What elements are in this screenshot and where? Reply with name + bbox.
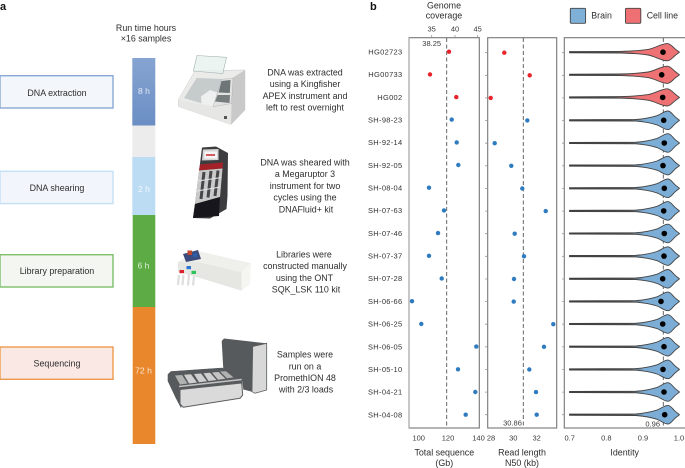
description: Library preparation: Libraries were	[276, 249, 332, 259]
step box: Sequencing	[0, 347, 113, 379]
violin: SH-98-23	[570, 111, 680, 130]
description: DNA extraction: using a Kingfisher	[270, 79, 340, 89]
violin: SH-04-08	[570, 405, 680, 424]
genome coverage ticks: 45	[474, 25, 482, 34]
sample labels: SH-04-21	[368, 388, 402, 397]
icon: PromethION sequencer	[168, 338, 267, 408]
x axis ticks: total sequence	[412, 434, 485, 442]
x axis ticks: identity	[564, 434, 684, 442]
description: Library preparation: SQK_LSK 110 kit	[272, 284, 341, 294]
sample labels: SH-05-10	[368, 365, 402, 374]
x axis title: read length: N50 (kb)	[505, 458, 539, 468]
genome coverage ticks: 35	[428, 25, 436, 34]
icon: ligation kit box	[178, 250, 251, 291]
icon: Kingfisher instrument	[178, 56, 245, 124]
bar segment: rest	[132, 126, 155, 157]
panel label a: a	[0, 1, 7, 13]
legend: Brain: Brain	[591, 11, 612, 21]
x axis ticks: identity: 0.9	[638, 434, 648, 442]
step box: Library preparation: Library preparation	[20, 266, 94, 276]
sample labels: HG02723	[368, 47, 402, 56]
front unit	[168, 368, 243, 408]
sample labels: SH-07-28	[368, 274, 402, 283]
x axis ticks: read length: 28	[487, 434, 495, 442]
description: DNA shearing: DNA was sheared with	[260, 157, 350, 167]
description: Sequencing: with 2/3 loads	[278, 385, 334, 395]
run time heading: Run time hours	[116, 23, 177, 33]
description: DNA shearing: a Megaruptor 3	[275, 169, 335, 179]
description: Sequencing: PromethION 48	[274, 373, 336, 383]
step box: Sequencing: Sequencing	[34, 358, 80, 368]
sample labels: SH-92-05	[368, 161, 402, 170]
sample labels: SH-07-63	[368, 206, 402, 215]
description: Sequencing: Samples were	[277, 350, 333, 360]
row ticks	[485, 53, 488, 415]
back unit	[222, 338, 267, 393]
violin: SH-06-05	[570, 337, 680, 356]
dots: total sequence	[410, 50, 478, 417]
description: DNA extraction: DNA was extracted	[267, 68, 343, 78]
chart: identity violins	[562, 38, 685, 458]
bar segment: 2 h	[132, 157, 155, 215]
description: Library preparation	[263, 249, 347, 294]
description: DNA shearing	[260, 157, 350, 214]
step box: Library preparation	[0, 255, 113, 287]
x axis title: identity: Identity	[610, 448, 640, 458]
violin: SH-06-66	[570, 292, 680, 311]
x axis ticks: read length: 32	[533, 434, 541, 442]
x axis title: total sequence	[414, 448, 474, 468]
bar segment: 72 h: 72 h	[135, 366, 152, 376]
bar segment: 72 h	[133, 307, 155, 444]
icon: Megaruptor instrument	[193, 146, 228, 218]
sample labels: SH-98-23	[368, 115, 402, 124]
sample labels	[368, 47, 402, 419]
genome coverage axis title: coverage	[426, 11, 462, 21]
sample labels: SH-07-46	[368, 229, 402, 238]
violin: SH-06-25	[570, 315, 680, 333]
description: DNA shearing: DNAFluid+ kit	[279, 204, 334, 214]
bar segment: 8 h	[132, 58, 155, 126]
genome coverage ticks: 40	[451, 25, 459, 34]
sample labels: HG00733	[368, 70, 402, 79]
reference value 30.86: 30.86	[503, 419, 522, 428]
run time heading: ×16 samples	[121, 34, 172, 44]
violin: SH-07-28	[570, 270, 680, 288]
x axis title: total sequence: (Gb)	[435, 458, 453, 468]
step box: DNA extraction: DNA extraction	[27, 88, 87, 98]
sample labels: SH-08-04	[368, 184, 402, 192]
x axis ticks: identity: 0.8	[601, 434, 612, 442]
legend	[570, 8, 678, 23]
description: Library preparation: constructed manually	[263, 261, 347, 271]
step box: DNA shearing: DNA shearing	[30, 183, 84, 193]
x axis title: total sequence: Total sequence	[414, 448, 474, 458]
chart: total sequence	[409, 0, 485, 468]
x axis ticks: total sequence: 120	[442, 434, 454, 442]
violin: SH-92-14	[570, 134, 680, 152]
description: Sequencing	[274, 350, 336, 395]
x axis ticks: identity: 1.0	[674, 434, 684, 442]
description: DNA shearing: instrument for two	[270, 181, 340, 191]
x axis ticks: read length	[487, 434, 541, 442]
bar segment: 2 h: 2 h	[138, 184, 150, 194]
description: Library preparation: using the ONT	[276, 273, 334, 283]
violin: HG02723	[570, 44, 680, 61]
bar segment: 6 h: 6 h	[138, 260, 150, 270]
legend: Cell line: Cell line	[647, 11, 678, 21]
sample labels: HG002	[377, 93, 402, 102]
panel label b: b	[370, 1, 377, 13]
sample labels: SH-06-25	[368, 320, 402, 329]
violin: SH-92-05	[570, 156, 680, 175]
step box: DNA extraction	[0, 76, 113, 108]
x axis ticks: total sequence: 140	[472, 434, 485, 442]
chart: read length N50	[485, 38, 557, 468]
sample labels: SH-04-08	[368, 410, 402, 419]
x axis title: read length	[498, 448, 546, 468]
violin: HG002	[570, 89, 680, 106]
sample labels: SH-06-66	[368, 297, 402, 306]
genome coverage ticks	[428, 25, 482, 38]
description: DNA extraction	[263, 68, 347, 113]
description: DNA shearing: cycles using the	[273, 193, 337, 203]
run time stacked bar	[132, 58, 155, 444]
x axis ticks: total sequence: 100	[412, 434, 425, 442]
description: Sequencing: run on a	[289, 361, 321, 371]
violin: SH-07-46	[570, 224, 680, 243]
sample labels: SH-92-14	[368, 138, 402, 147]
x axis ticks: read length: 30	[509, 434, 517, 442]
violin: SH-08-04	[570, 179, 680, 198]
dots: read length	[488, 50, 556, 417]
violin: SH-04-21	[570, 383, 680, 401]
x axis title: read length: Read length	[498, 448, 546, 458]
bar segment: 6 h	[133, 215, 155, 307]
sample labels: SH-07-37	[368, 252, 402, 260]
description: DNA extraction: APEX instrument and	[263, 91, 347, 101]
sample labels: SH-06-05	[368, 342, 402, 351]
genome coverage axis title	[426, 0, 462, 21]
violin: SH-07-63	[570, 202, 680, 220]
x axis ticks: identity: 0.7	[564, 434, 575, 442]
description: DNA extraction: left to rest overnight	[266, 103, 344, 113]
run time heading	[116, 23, 177, 44]
violin: SH-05-10	[570, 360, 680, 379]
row ticks	[562, 53, 564, 415]
step box: DNA shearing	[0, 171, 113, 204]
violin: HG00733	[570, 66, 680, 83]
bar segment: 8 h: 8 h	[138, 86, 150, 96]
violin: SH-07-37	[570, 247, 680, 265]
reference value 38.25: 38.25	[422, 39, 441, 48]
genome coverage axis title: Genome	[427, 0, 461, 10]
reference value 0.96: 0.96	[645, 420, 660, 428]
